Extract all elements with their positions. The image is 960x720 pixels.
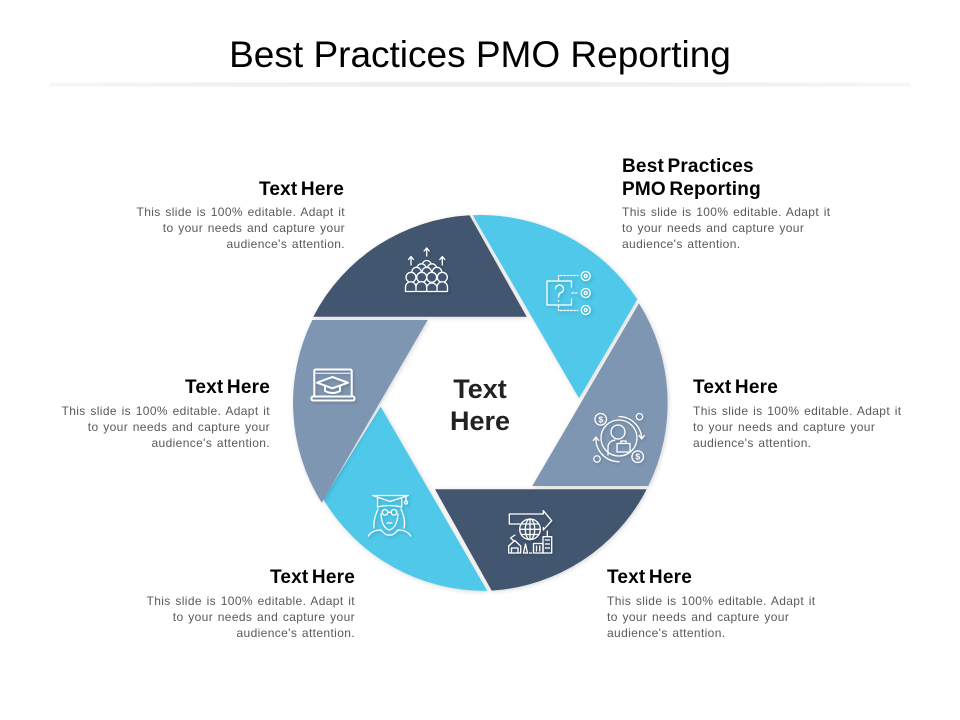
body: This slide is 100% editable. Adapt it <box>607 594 815 608</box>
text block: top left <box>136 179 345 251</box>
body: to your needs and capture your <box>622 221 804 235</box>
segment: bottom dark <box>435 489 647 591</box>
segment: right slate <box>532 303 668 486</box>
body <box>693 404 901 450</box>
heading: Text Here <box>259 179 344 200</box>
body: to your needs and capture your <box>163 221 345 235</box>
body: This slide is 100% editable. Adapt it <box>137 205 345 219</box>
body: audience's attention. <box>152 436 270 450</box>
heading: Text Here <box>270 567 355 588</box>
text block: bottom right <box>607 567 815 640</box>
text block: left <box>62 377 270 450</box>
segment: top dark <box>313 215 527 317</box>
heading: Text Here <box>185 377 270 398</box>
center label: Text <box>453 374 507 404</box>
body: to your needs and capture your <box>693 420 875 434</box>
dollar signs: $ <box>598 414 603 424</box>
body: This slide is 100% editable. Adapt it <box>62 404 270 418</box>
icon: crowd with arrows <box>406 248 448 292</box>
body: audience's attention. <box>607 626 725 640</box>
body <box>146 594 355 640</box>
dollar signs <box>598 414 640 462</box>
icon: person with money cycle <box>593 414 644 463</box>
text block: right <box>693 377 901 450</box>
segment: left slate <box>293 320 428 503</box>
text block: bottom left <box>146 567 355 640</box>
body <box>622 205 830 251</box>
dollar signs: $ <box>635 452 640 462</box>
body: audience's attention. <box>237 626 355 640</box>
body: audience's attention. <box>227 237 345 251</box>
center label: Here <box>450 406 510 436</box>
heading: Text Here <box>693 377 778 398</box>
heading: Text Here <box>607 567 692 588</box>
body <box>62 404 270 450</box>
segment: bottom left cyan <box>323 407 487 591</box>
icon: globe with city <box>509 511 552 553</box>
title underline shadow <box>50 82 910 87</box>
heading: PMO Reporting <box>622 179 761 200</box>
icon: question with targets <box>547 272 590 314</box>
body: audience's attention. <box>622 237 740 251</box>
body: This slide is 100% editable. Adapt it <box>622 205 830 219</box>
heading <box>622 156 761 200</box>
body: to your needs and capture your <box>88 420 270 434</box>
heading: Best Practices <box>622 156 754 177</box>
body: audience's attention. <box>693 436 811 450</box>
center label <box>450 374 510 436</box>
title: Best Practices PMO Reporting <box>229 34 731 75</box>
segment: top right cyan <box>473 215 637 398</box>
body: to your needs and capture your <box>607 610 789 624</box>
icon: laptop with graduation cap <box>312 370 354 400</box>
body: This slide is 100% editable. Adapt it <box>693 404 901 418</box>
body <box>136 205 345 251</box>
body <box>607 594 815 640</box>
icon: graduate woman <box>368 496 411 536</box>
body: This slide is 100% editable. Adapt it <box>147 594 355 608</box>
body: to your needs and capture your <box>173 610 355 624</box>
text block: top right <box>622 156 830 251</box>
